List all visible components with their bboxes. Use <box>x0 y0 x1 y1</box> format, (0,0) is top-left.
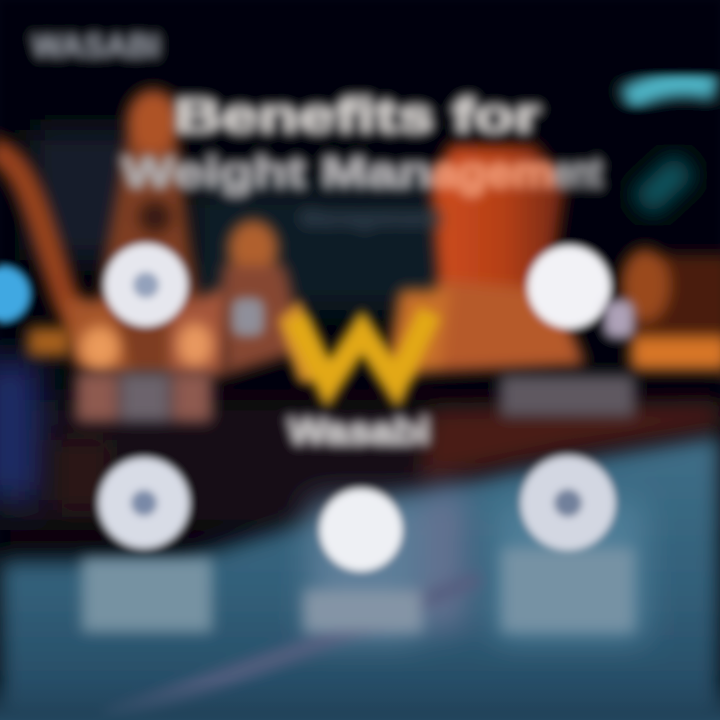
title: Benefits for <box>174 90 540 143</box>
large orange block <box>385 145 585 378</box>
yellow W logo <box>278 300 430 384</box>
title: Weight Man <box>122 148 432 197</box>
small grey icon centre-left <box>232 298 264 336</box>
teal arc icon <box>626 84 716 100</box>
icon: circle lower right <box>521 456 615 550</box>
small grey icon right <box>604 300 634 338</box>
warm glow strips <box>28 323 213 370</box>
title: agem <box>432 148 554 197</box>
left blue icon <box>0 267 29 321</box>
icon: white circle upper left <box>105 244 187 326</box>
text block upper right <box>500 375 635 417</box>
title <box>122 90 602 197</box>
bottom floor edge <box>0 680 720 720</box>
icon: white circle upper right <box>528 246 610 328</box>
subtitle: Management <box>300 205 440 232</box>
wordmark: Wasabi <box>288 411 430 453</box>
card halos on floor <box>310 490 645 640</box>
lower floor panel <box>0 435 720 720</box>
orange figure left <box>65 90 230 375</box>
red band above floor <box>420 405 720 480</box>
logo text: WASABI <box>32 28 160 64</box>
text block lower centre <box>304 590 422 632</box>
diagonal light streak <box>105 578 480 720</box>
title: ent <box>554 148 602 197</box>
text block lower left <box>82 558 212 632</box>
left orange arc <box>0 150 100 360</box>
right orange cluster <box>621 249 720 370</box>
icon: circle lower centre <box>320 489 402 571</box>
icon: circle lower left <box>99 458 189 548</box>
dark red left of the lower circle <box>55 440 110 510</box>
text block lower right <box>502 548 634 632</box>
orange figure centre-left <box>222 220 305 375</box>
text block upper left <box>76 372 212 422</box>
left dark blue column <box>0 360 40 500</box>
teal small mark <box>642 165 685 205</box>
